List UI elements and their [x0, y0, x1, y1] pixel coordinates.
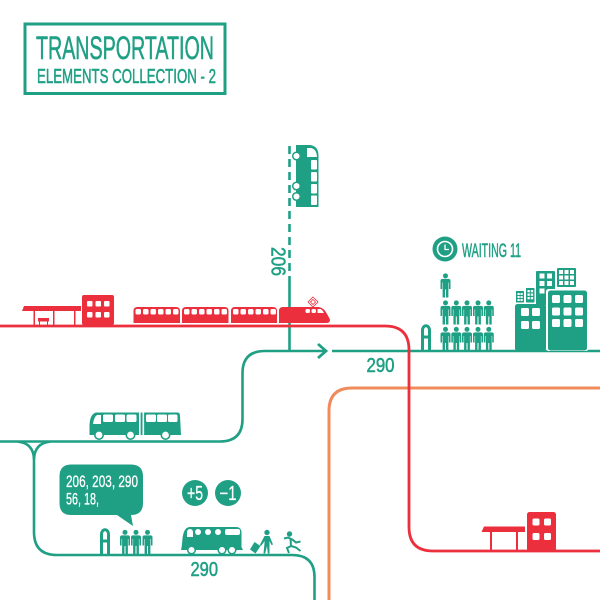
route line: teal lower branch: [0, 351, 600, 600]
badge: minus 1: −1: [220, 483, 236, 505]
label: route 290 lower: 290: [190, 559, 218, 581]
route line: 206 solid: [288, 282, 291, 351]
speech bubble with route numbers: [60, 464, 143, 526]
icon: running passenger: [284, 531, 300, 553]
route list line 1: 206, 203, 290: [66, 472, 138, 491]
icon: bus stop lower: [102, 530, 108, 554]
label: route 290 upper: 290: [366, 355, 394, 377]
title box: [25, 24, 225, 94]
red station and building, lower right: [482, 512, 556, 552]
badge: minus 1: [215, 480, 241, 506]
label: waiting 11: WAITING 11: [462, 240, 521, 262]
icon: bus lower: [181, 527, 243, 554]
icon: articulated bus: [90, 412, 181, 439]
red train: [134, 297, 330, 323]
icon: vertical bus on route 206: [293, 145, 318, 207]
subtitle: ELEMENTS COLLECTION - 2: [37, 65, 216, 88]
badge: plus 5: [182, 480, 208, 506]
icon: traveller with suitcase: [250, 530, 273, 554]
title: TRANSPORTATION: [36, 30, 214, 66]
route line: orange: [329, 388, 600, 600]
route line: 206 dashed: [288, 146, 291, 282]
route label 206: 206: [266, 247, 288, 276]
red station and building, left: [22, 295, 114, 325]
arrow: route direction: [318, 344, 326, 358]
icon: clock: [432, 236, 458, 262]
badge: plus 5: +5: [187, 483, 203, 505]
waiting passengers lower: [120, 530, 152, 554]
route list line 2: 56, 18,: [66, 490, 99, 508]
waiting passengers: [440, 273, 494, 351]
icon: bus stop right: [422, 326, 430, 350]
route line: red: [0, 326, 600, 551]
teal city buildings: [515, 268, 588, 351]
